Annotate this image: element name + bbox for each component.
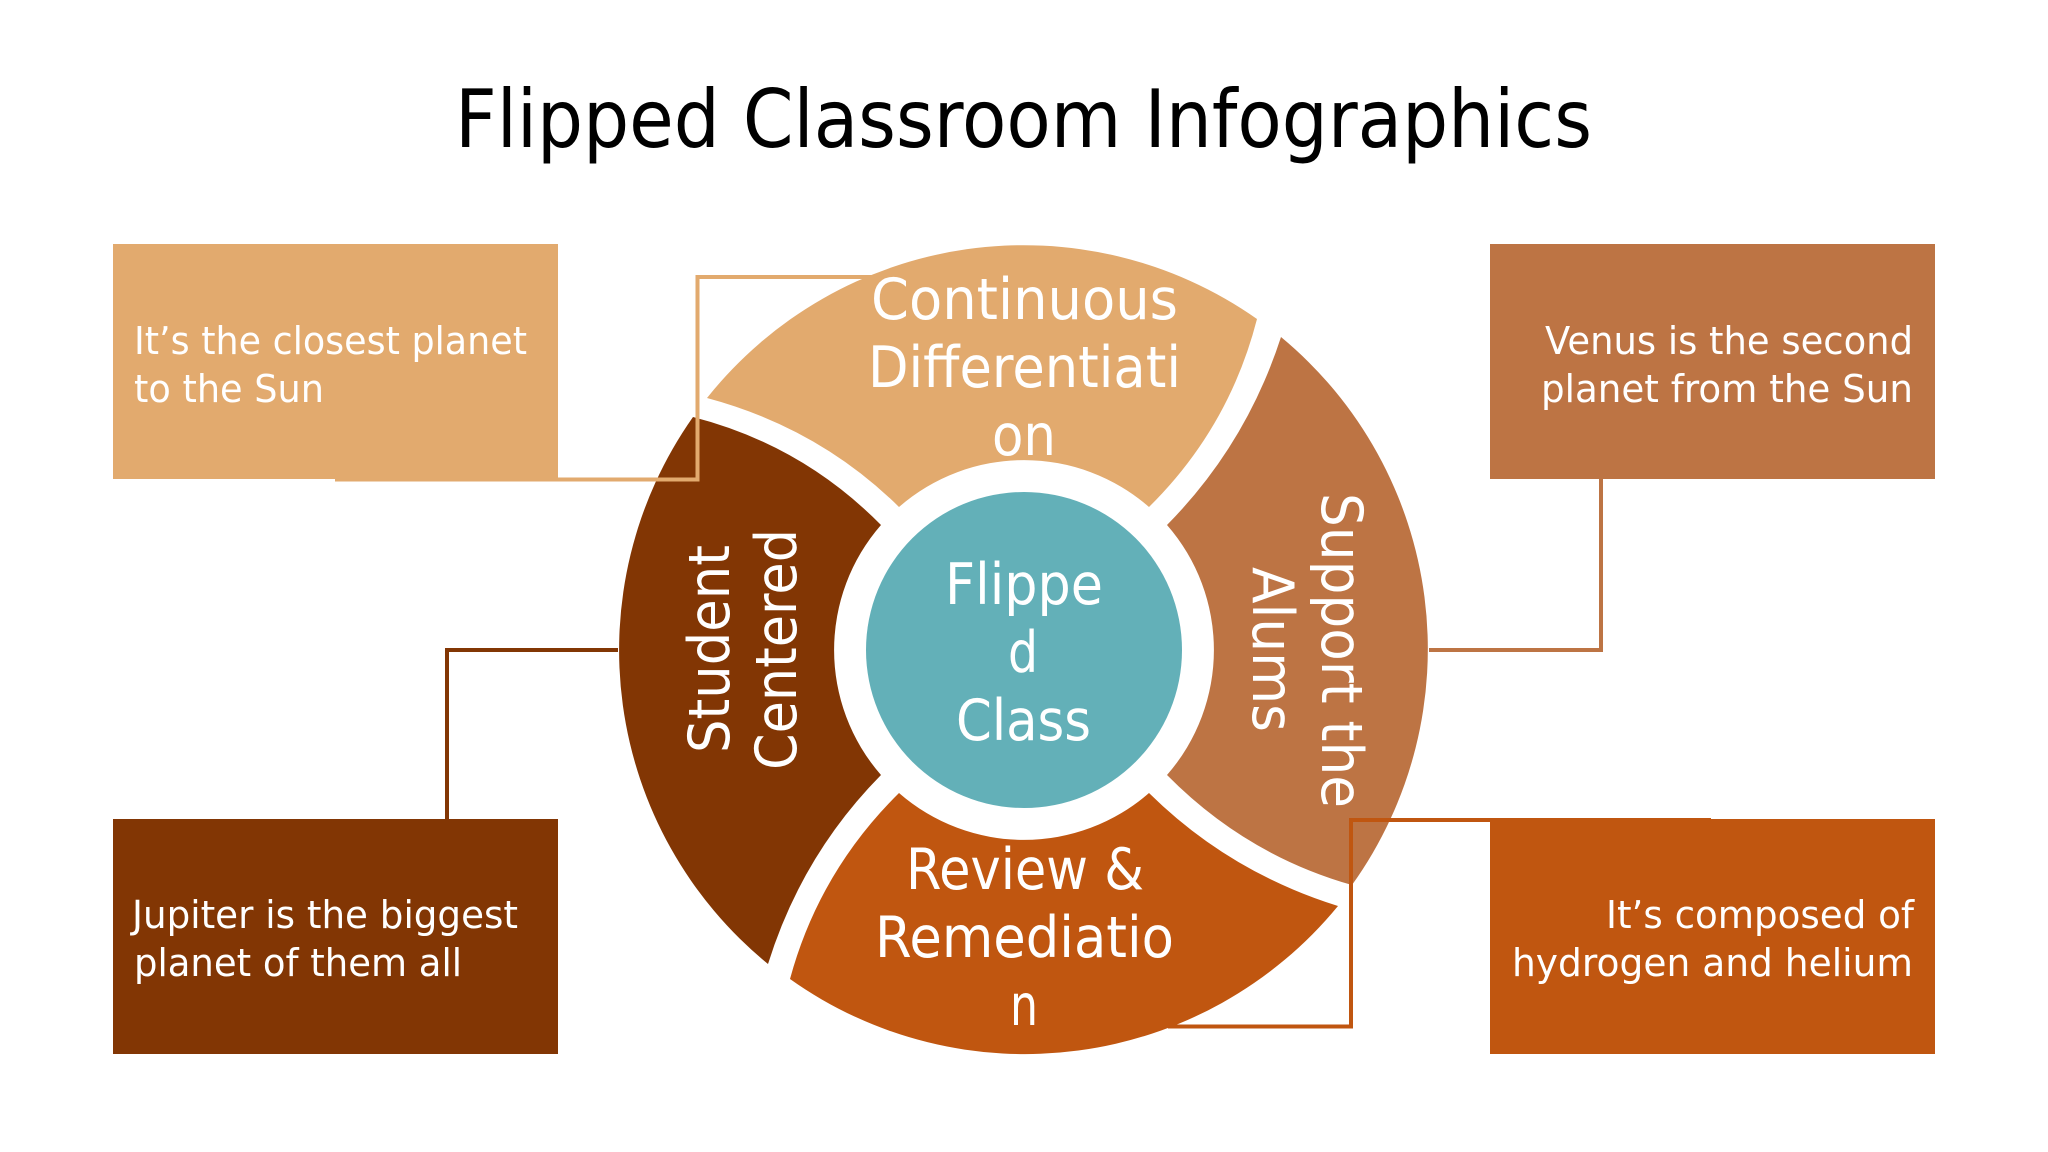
panel: saturn: It’s composed of [1606,893,1915,938]
segment: review and remediation: Review & [906,837,1144,903]
panel: saturn [1490,819,1935,1054]
panel: jupiter: Jupiter is the biggest [130,893,518,938]
panel: jupiter: planet of them all [134,941,462,986]
panel: jupiter [113,819,558,1054]
segment: continuous differentiation [707,245,1257,507]
connector: saturn to bottom segment [1168,820,1711,1026]
segment: review and remediation [790,793,1338,1054]
panel: mercury: It’s the closest planet [134,319,527,364]
title: Flipped Classroom Infographics [455,73,1592,166]
panel: mercury: to the Sun [134,367,324,412]
segment: student centered: Centered [744,529,810,770]
segment: review and remediation: Remediatio [875,905,1174,971]
segment: support the alums [1167,337,1428,885]
connector: jupiter to left segment [447,650,618,819]
center circle: Flippe [945,552,1103,618]
segment: continuous differentiation: Differentiati [868,335,1181,401]
center circle [866,492,1182,808]
segment: review and remediation: n [1010,973,1038,1039]
segment: student centered [619,417,881,964]
segment: continuous differentiation: Continuous [871,267,1178,333]
segment: support the alums: Alums [1239,567,1305,732]
segment: student centered: Student [677,545,743,753]
panel: venus [1490,244,1935,479]
panel: saturn: hydrogen and helium [1512,941,1913,986]
panel: mercury [113,244,558,479]
connector: venus to right segment [1429,479,1601,650]
segment: continuous differentiation: on [992,403,1056,469]
segment: support the alums: Support the [1308,493,1374,808]
panel: venus: Venus is the second [1545,319,1913,364]
connector: mercury to top segment [335,277,873,480]
center circle: d [1008,620,1038,686]
panel: venus: planet from the Sun [1541,367,1913,412]
circular diagram [619,245,1428,1054]
center circle: Class [956,688,1091,754]
